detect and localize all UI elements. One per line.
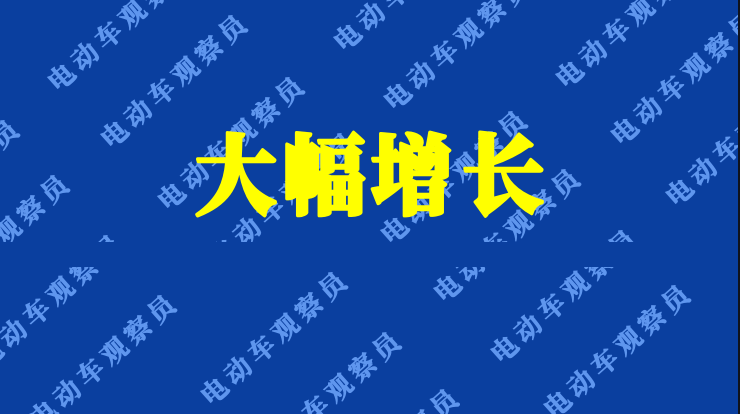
right edge strip — [738, 0, 740, 414]
watermark B: 电动车观察员 — [95, 7, 255, 154]
watermark L: 电动车观察员 — [375, 103, 535, 250]
watermark N: 电动车观察员 — [485, 222, 645, 369]
watermark R: 电动车观察员 — [195, 264, 355, 411]
title: 大幅增长 — [195, 131, 544, 227]
watermark C: 电动车观察员 — [152, 69, 312, 216]
band hiding the watermark — [0, 242, 740, 267]
watermark K: 电动车观察员 — [204, 125, 364, 272]
watermark M: 电动车观察员 — [428, 161, 588, 308]
